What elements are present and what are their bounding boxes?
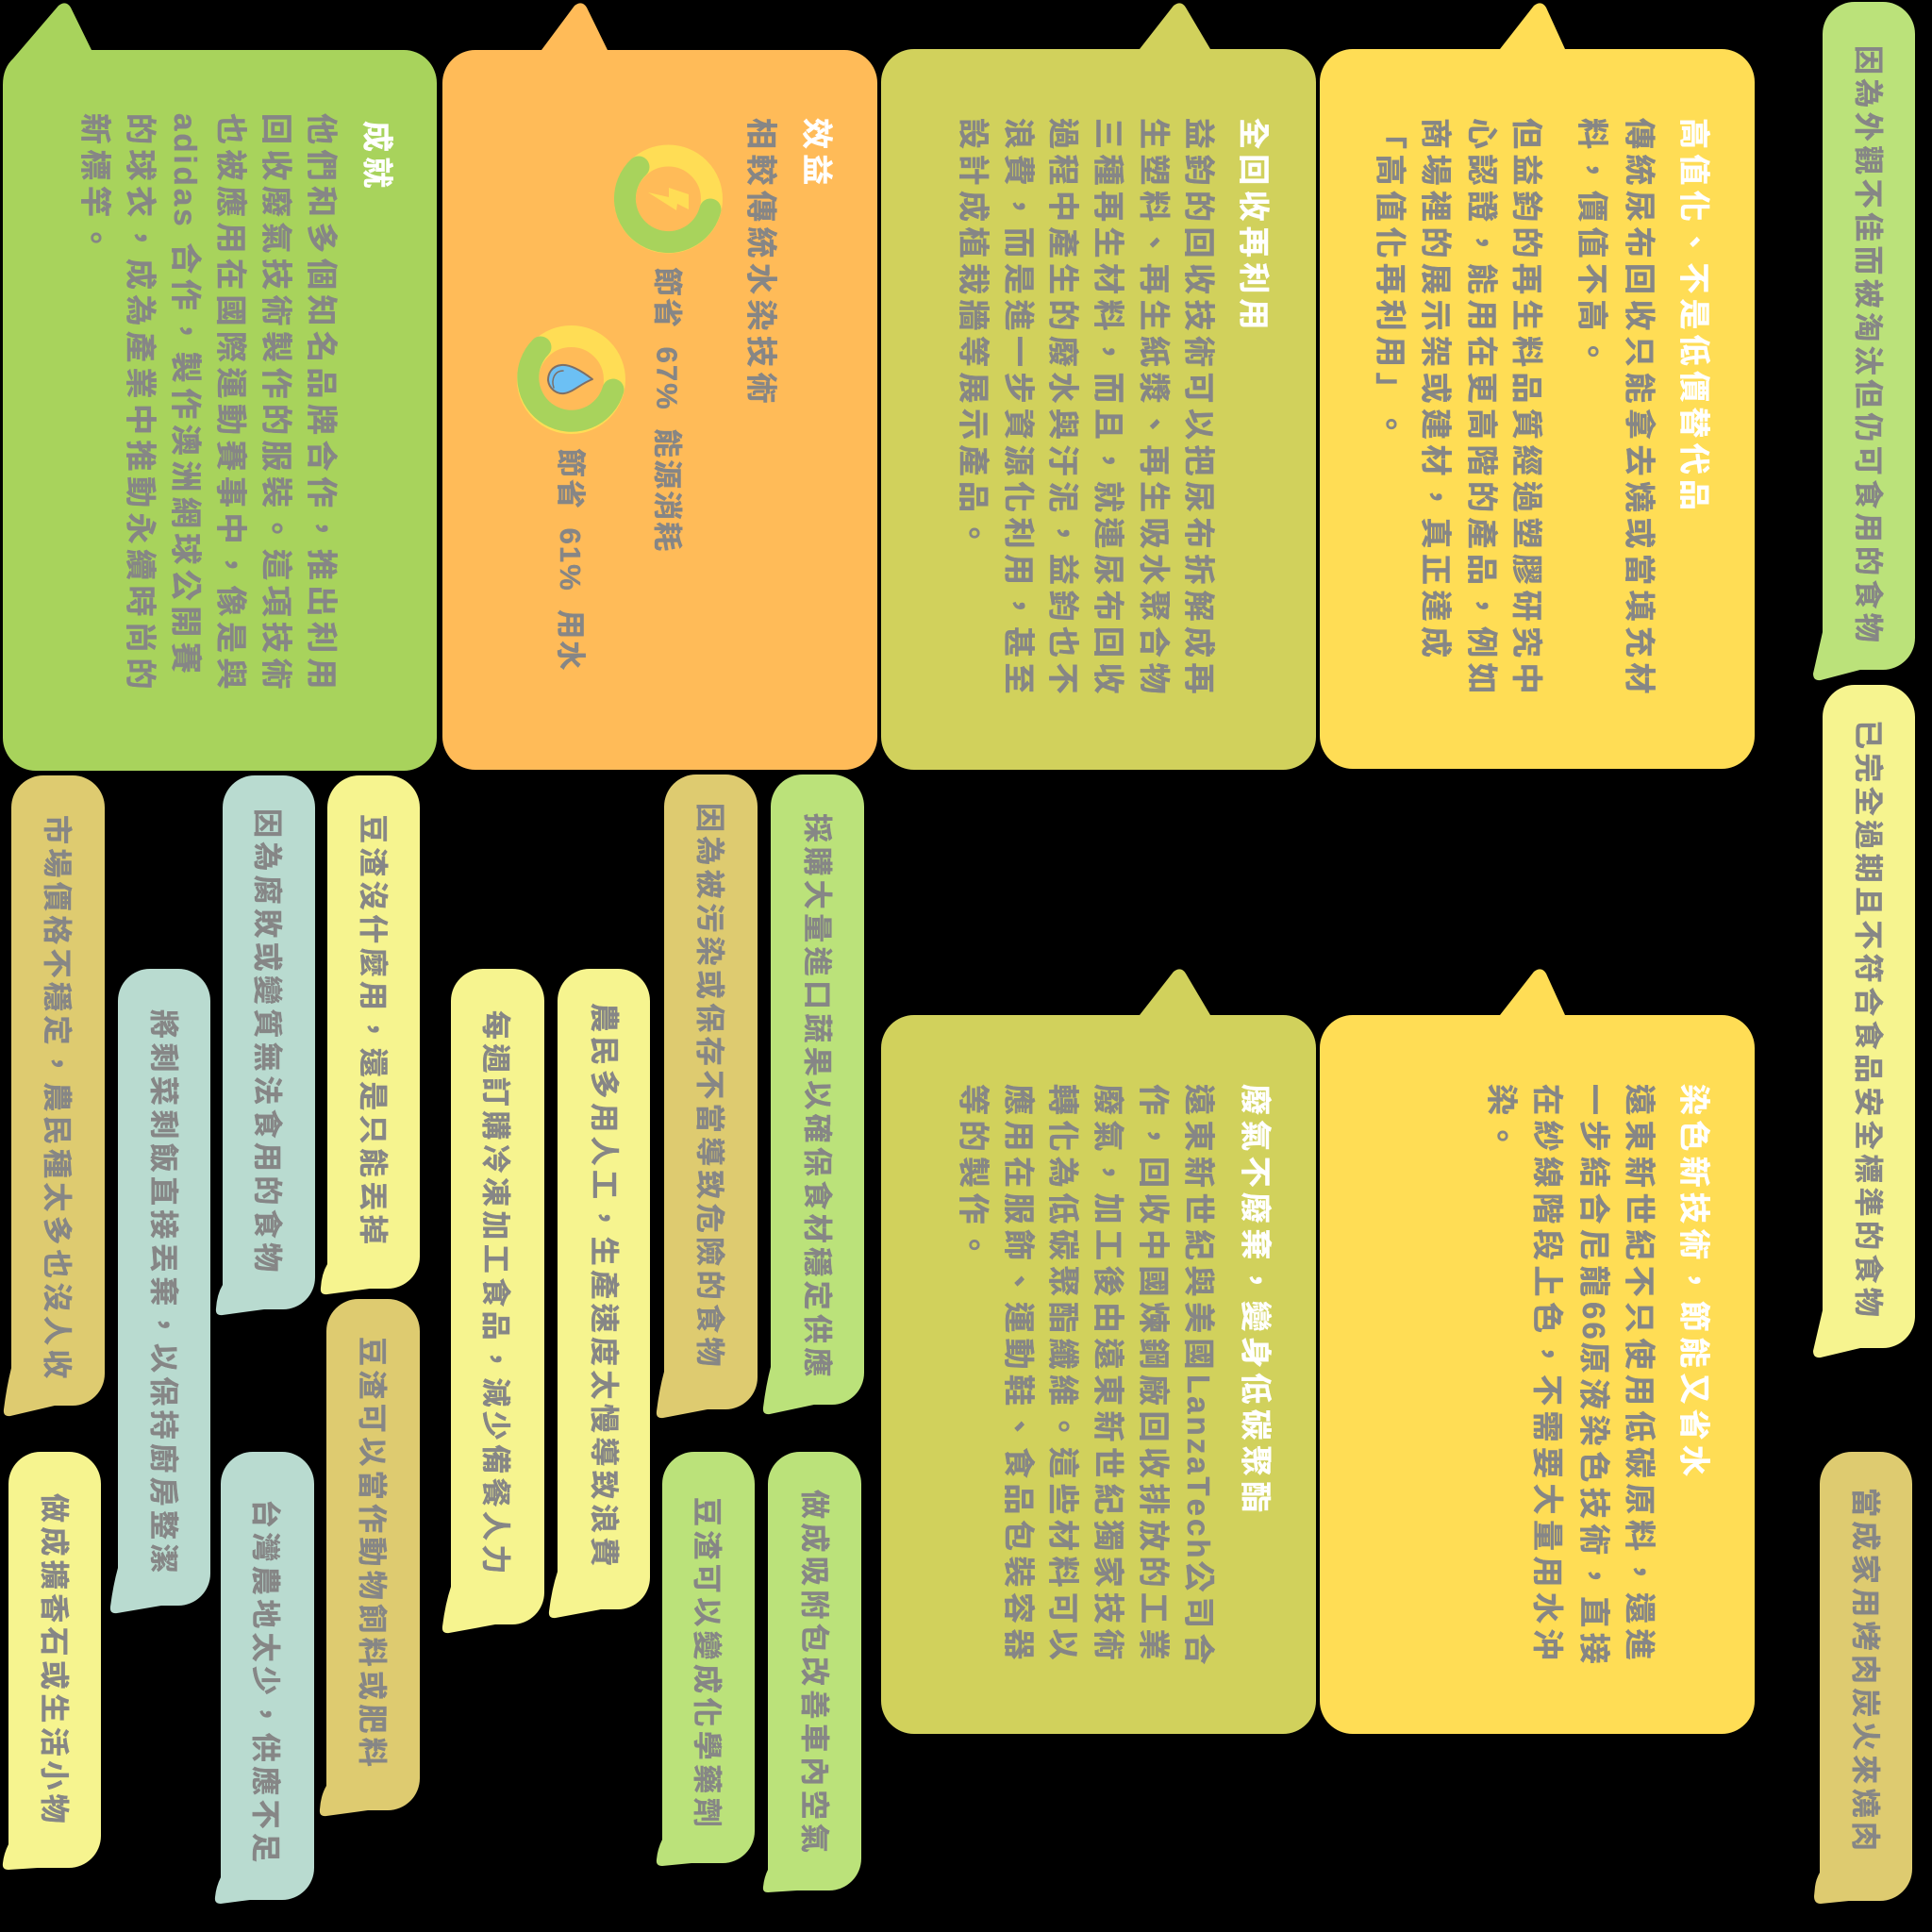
bubble: unstable market: 市場價格不穩定，農民種太多也沒人收 [40, 815, 74, 1383]
text block: achievements body [77, 113, 340, 694]
bubble: chemical agent [657, 1452, 755, 1866]
bubble: small farmland [215, 1452, 314, 1904]
text block: high value body: 商場裡的展示架或建材，真正達成 [1419, 118, 1453, 662]
text block: full recycling body: 三種再生材料，而且，就連尿布回收 [1091, 118, 1126, 699]
bubble: small farmland: 台灣農地太少，供應不足 [249, 1499, 281, 1866]
text block: achievements body: 的球衣，成為產業中推動永續時尚的 [123, 113, 158, 694]
bubble: contaminated food: 因為被污染或保存不當導致危險的食物 [692, 803, 726, 1371]
text block: waste gas body: 遠東新世紀與美國 LanzaTech 公司合 [1181, 1084, 1217, 1670]
bubble: imperfect food: 因為外觀不佳而被淘汰但仍可食用的食物 [1851, 45, 1885, 646]
bubble: spoiled food: 因為腐敗或變質無法食用的食物 [251, 808, 283, 1276]
bubble: imported produce: 採購大量進口蔬果以確保食材穩定供應 [800, 813, 834, 1381]
panel: benefits [442, 3, 877, 770]
text block: dyeing technology body [1485, 1084, 1657, 1669]
text block: high value body: 「高值化再利用」。 [1374, 118, 1407, 445]
text block: full recycling body: 設計成植栽牆等展示產品。 [957, 118, 991, 554]
bubble: okara useless [321, 775, 420, 1294]
chart: energy donut [625, 156, 711, 242]
text block: waste gas body: 廢氣，加工後由遠東新世紀獨家技術 [1091, 1084, 1126, 1665]
text block: dyeing technology body: 染。 [1485, 1084, 1519, 1157]
bubble: okara feed: 豆渣可以當作動物飼料或肥料 [355, 1337, 389, 1771]
bubble: spoiled food [216, 775, 315, 1315]
heading: waste gas: 廢氣不廢棄，變身低碳聚酯 [1238, 1084, 1274, 1518]
text block: full recycling body: 生塑料、再生紙漿、再生吸水聚合物 [1137, 118, 1172, 699]
text: energy saving: 節省 67% 能源消耗 [651, 267, 683, 553]
text block: waste gas body: 應用在服飾、運動鞋、食品包裝容器 [1002, 1084, 1036, 1665]
text block: waste gas body [957, 1084, 1217, 1670]
bubble: leftovers: 將剩菜剩飯直接丟棄，以保持廚房整潔 [147, 1009, 179, 1577]
bubble: unstable market [4, 775, 105, 1416]
bubble: okara useless: 豆渣沒什麼用，還是只能丟掉 [357, 814, 389, 1248]
text block: achievements body: 他們和多個知名品牌合作，推出利用 [304, 113, 340, 694]
text block: full recycling body: 過程中產生的廢水與汙泥，益鈞也不 [1045, 118, 1081, 699]
panel: high value [1320, 3, 1755, 769]
text block: achievements body: 也被應用在國際運動賽事中，像是與 [213, 113, 249, 694]
bubble: expired food [1813, 685, 1915, 1357]
heading: achievements: 成就 [360, 121, 394, 193]
heading: dyeing technology: 染色新技術，節能又省水 [1677, 1084, 1711, 1481]
text block: dyeing technology body: 一步結合尼龍 66 原液染色技術，直接 [1577, 1084, 1611, 1669]
text: benefits intro: 相較傳統水染技術 [743, 118, 779, 408]
text block: achievements body: adidas 合作，製作澳洲網球公開賽 [168, 113, 204, 678]
text block: dyeing technology body: 在紗線階段上色，不需要大量用水沖 [1530, 1084, 1565, 1665]
bubble: aroma stone [3, 1452, 101, 1870]
heading: high value: 高值化、不是低價替代品 [1677, 118, 1711, 515]
text block: waste gas body: 作，回收中國煉鋼廠回收排放的工業 [1136, 1084, 1172, 1665]
bubble: manual labour [549, 969, 650, 1618]
bubble: frozen food [442, 969, 544, 1633]
bubble: frozen food: 每週訂購冷凍加工食品，減少備餐人力 [479, 1010, 511, 1578]
text block: high value body: 料，價值不高。 [1575, 118, 1609, 372]
text block: full recycling body [957, 118, 1217, 699]
bubble: okara feed [320, 1299, 420, 1816]
text block: waste gas body: 等的製作。 [957, 1084, 991, 1266]
text block: high value body: 傳統尿布回收只能拿去燒或當填充材 [1623, 118, 1657, 699]
bubble: imperfect food [1813, 2, 1915, 680]
text block: full recycling body: 浪費，而是進一步資源化利用，甚至 [1002, 118, 1036, 699]
panel: dyeing technology [1320, 969, 1755, 1734]
text block: high value body [1374, 118, 1657, 699]
panel: waste gas [881, 969, 1316, 1734]
icon: water drop [548, 365, 592, 393]
bubble: aroma stone: 做成擴香石或生活小物 [38, 1493, 70, 1827]
bubble: charcoal [1814, 1452, 1912, 1904]
bubble: imported produce [763, 774, 864, 1414]
icon: lightning bolt [648, 188, 689, 210]
panel: full recycling [881, 3, 1316, 770]
heading: full recycling: 全回收再利用 [1236, 118, 1272, 335]
bubble: chemical agent: 豆渣可以變成化學藥劑 [691, 1497, 723, 1831]
chart: water donut [528, 336, 615, 423]
text block: dyeing technology body: 遠東新世紀不只使用低碳原料，還進 [1623, 1084, 1657, 1665]
bubble: manual labour: 農民多用人工，生產速度太慢導致浪費 [587, 1003, 621, 1571]
bubble: absorbent pack [763, 1452, 861, 1892]
heading: benefits: 效益 [800, 118, 834, 191]
text block: high value body: 心認證，能用在更高階的產品，例如 [1464, 118, 1500, 699]
text: water saving: 節省 61% 用水 [554, 448, 587, 672]
text block: achievements body: 新標竿。 [77, 113, 113, 258]
text block: achievements body: 回收廢氣技術製作的服裝。這項技術 [258, 113, 294, 694]
bubble: contaminated food [657, 774, 758, 1418]
bubble: leftovers [110, 969, 210, 1613]
text block: full recycling body: 益鈞的回收技術可以把尿布拆解成再 [1181, 118, 1217, 699]
bubble: charcoal: 當成家用烤肉炭火來燒肉 [1849, 1488, 1881, 1855]
text block: waste gas body: 轉化為低碳聚酯纖維。這些材料可以 [1045, 1084, 1081, 1665]
bubble: expired food: 已完全過期且不符合食品安全標準的食物 [1851, 720, 1885, 1321]
bubble: absorbent pack: 做成吸附包改善車內空氣 [798, 1490, 830, 1857]
text block: high value body: 但益鈞的再生料品質經過塑膠研究中 [1509, 118, 1544, 699]
panel: achievements [3, 3, 437, 771]
